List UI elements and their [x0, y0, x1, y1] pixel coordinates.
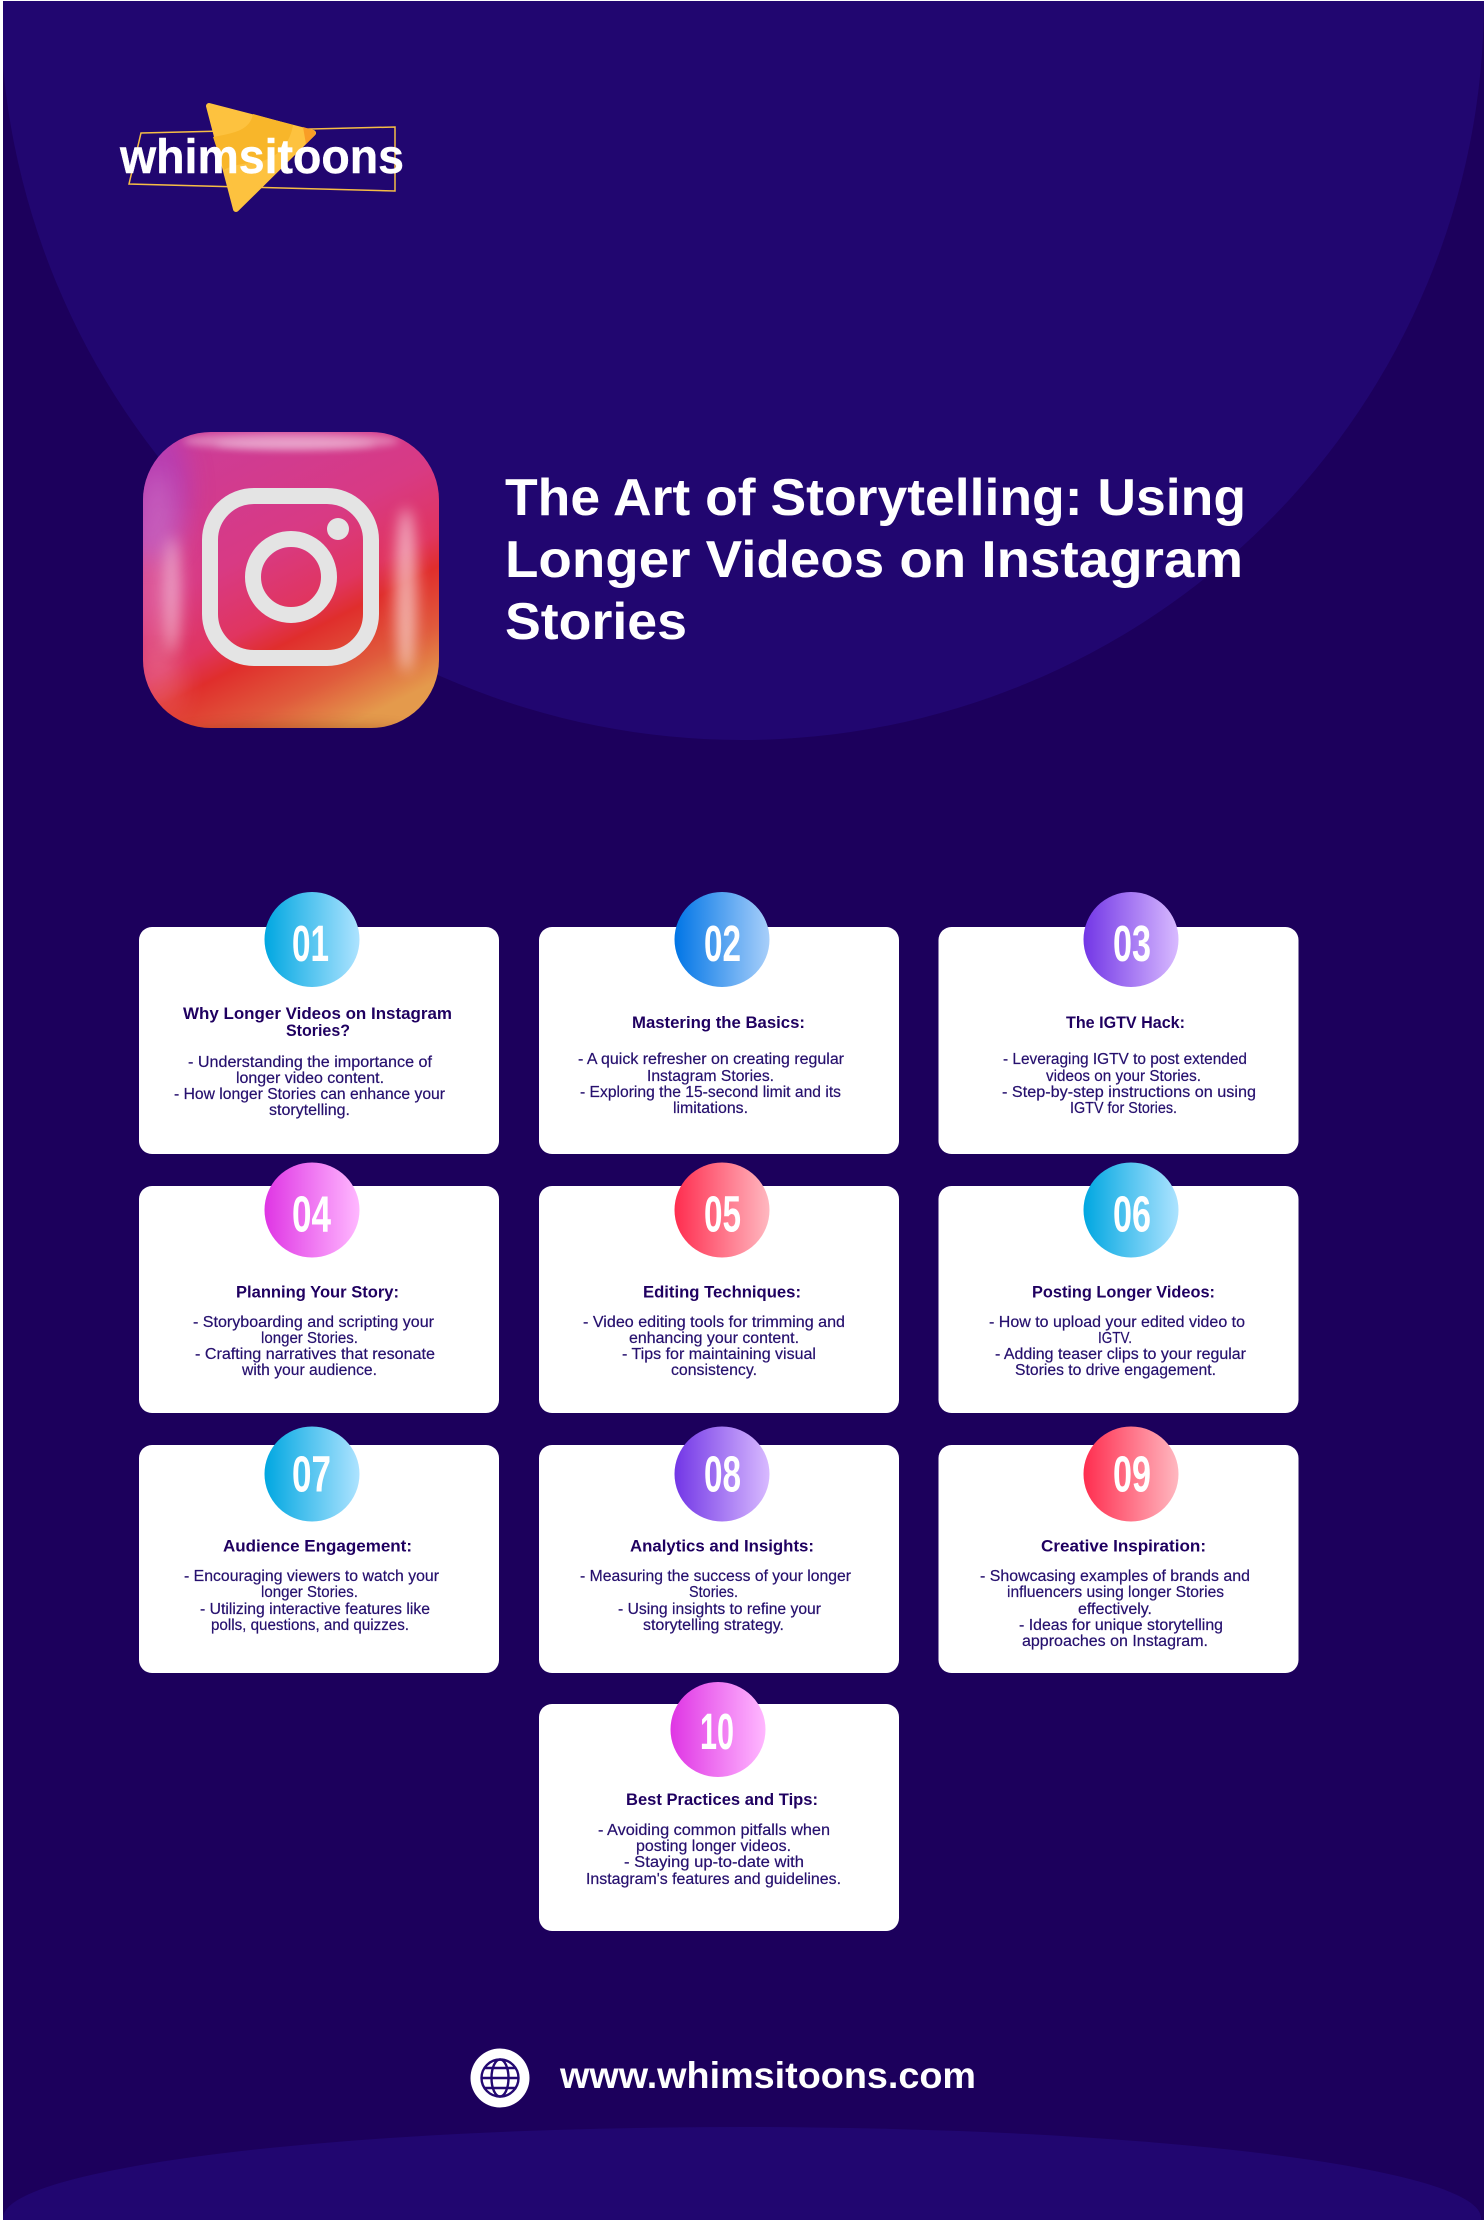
body 05: consistency. [671, 1362, 757, 1379]
body 03: - Step-by-step instructions on using [1002, 1084, 1256, 1101]
heading 06: Posting Longer Videos: [1032, 1282, 1215, 1302]
footer: website [470, 2048, 976, 2108]
body 01: storytelling. [269, 1102, 350, 1119]
bottom arc background shape [3, 2127, 1481, 2220]
panel: card 05 [539, 1162, 899, 1413]
body 06: Stories to drive engagement. [1015, 1362, 1216, 1379]
body 02 [578, 1051, 844, 1117]
tile highlights [143, 432, 426, 728]
badge 01 [264, 892, 360, 987]
body 08: - Measuring the success of your longer [580, 1568, 851, 1585]
body 01 [174, 1054, 445, 1119]
body 09: influencers using longer Stories [1007, 1584, 1224, 1601]
body 08: - Using insights to refine your [618, 1601, 821, 1618]
body 07: - Encouraging viewers to watch your [184, 1568, 439, 1585]
body 05: enhancing your content. [629, 1330, 799, 1347]
body 01: - Understanding the importance of [188, 1054, 433, 1071]
panel: card 07 [139, 1426, 499, 1673]
body 10: posting longer videos. [636, 1838, 791, 1855]
body 09: effectively. [1078, 1601, 1152, 1618]
body 09 [980, 1568, 1250, 1650]
body 02: limitations. [673, 1100, 748, 1117]
panel: card 03 [938, 892, 1298, 1154]
badge 02 [674, 892, 770, 987]
logo triangle tip [303, 127, 315, 144]
badge 01: 01 [292, 915, 329, 972]
panel: card 10 [539, 1682, 899, 1931]
badge 04: 04 [292, 1186, 331, 1242]
body 02: Instagram Stories. [647, 1068, 774, 1085]
body 09: - Ideas for unique storytelling [1019, 1617, 1223, 1634]
body 07: - Utilizing interactive features like [200, 1601, 430, 1618]
badge 06: 06 [1113, 1186, 1151, 1242]
badge 07 [264, 1426, 360, 1522]
badge 06 [1084, 1162, 1178, 1258]
heading 10: Best Practices and Tips: [626, 1790, 818, 1809]
instagram lens [253, 539, 329, 615]
badge 03 [1084, 892, 1178, 987]
instagram dot [327, 518, 349, 540]
heading 01: Stories? [286, 1021, 350, 1040]
panel: card 08 [539, 1426, 899, 1673]
title: Stories [505, 593, 687, 651]
body 09: - Showcasing examples of brands and [980, 1568, 1250, 1585]
title: Longer Videos on Instagram [505, 531, 1243, 589]
top arc background shape [0, 0, 1484, 740]
instagram camera outline [210, 496, 371, 658]
logo play triangle [209, 106, 313, 209]
body 07: longer Stories. [261, 1584, 358, 1601]
body 10 [586, 1822, 841, 1888]
body 10: - Avoiding common pitfalls when [598, 1822, 830, 1839]
panel: card 02 [539, 892, 899, 1154]
body 03: - Leveraging IGTV to post extended [1003, 1051, 1247, 1068]
heading 02: Mastering the Basics: [632, 1013, 805, 1032]
body 03 [1002, 1051, 1256, 1117]
panel: card 01 [139, 892, 499, 1154]
body 08: Stories. [689, 1584, 738, 1601]
heading 07: Audience Engagement: [223, 1536, 412, 1556]
body 07: polls, questions, and quizzes. [211, 1617, 409, 1634]
body 01: - How longer Stories can enhance your [174, 1086, 445, 1103]
body 05: - Tips for maintaining visual [622, 1346, 816, 1363]
body 05: - Video editing tools for trimming and [583, 1314, 845, 1331]
badge 08 [674, 1426, 770, 1522]
logo triangle shade [213, 114, 293, 170]
body 06 [989, 1314, 1246, 1379]
body 04: - Storyboarding and scripting your [193, 1314, 434, 1331]
body 04: longer Stories. [261, 1330, 358, 1347]
badge 08: 08 [704, 1446, 741, 1502]
heading 01: Why Longer Videos on Instagram [183, 1004, 452, 1023]
badge 10 [670, 1682, 766, 1777]
panel: card 04 [139, 1162, 499, 1413]
body 08 [580, 1568, 851, 1634]
body 06: - Adding teaser clips to your regular [995, 1346, 1246, 1363]
tile base [143, 432, 439, 728]
heading 03: The IGTV Hack: [1066, 1013, 1185, 1032]
logo: whimsitoons [119, 106, 404, 209]
body 09: approaches on Instagram. [1022, 1633, 1208, 1650]
body 08: storytelling strategy. [643, 1617, 784, 1634]
body 07 [184, 1568, 439, 1634]
badge 07: 07 [292, 1446, 331, 1502]
badge 09: 09 [1113, 1446, 1151, 1502]
body 10: Instagram's features and guidelines. [586, 1871, 841, 1888]
panel: card 06 [938, 1162, 1298, 1413]
title [505, 469, 1246, 651]
body 03: videos on your Stories. [1046, 1068, 1201, 1085]
body 02: - A quick refresher on creating regular [578, 1051, 844, 1068]
icon: globe [470, 2048, 530, 2108]
badge 02: 02 [704, 915, 741, 972]
heading 05: Editing Techniques: [643, 1282, 801, 1302]
body 02: - Exploring the 15-second limit and its [580, 1084, 841, 1101]
body 04: - Crafting narratives that resonate [195, 1346, 435, 1363]
body 06: IGTV. [1098, 1330, 1132, 1347]
badge 10: 10 [700, 1703, 734, 1760]
badge 05: 05 [704, 1186, 741, 1242]
heading 04: Planning Your Story: [236, 1282, 399, 1302]
logo frame [129, 127, 395, 191]
body 06: - How to upload your edited video to [989, 1314, 1245, 1331]
body 04: with your audience. [241, 1362, 377, 1379]
website url: www.whimsitoons.com [559, 2055, 976, 2096]
logo wordmark: whimsitoons [119, 131, 404, 184]
body 04 [193, 1314, 435, 1379]
badge 09 [1084, 1426, 1178, 1522]
body 10: - Staying up-to-date with [624, 1854, 804, 1871]
badge 05 [674, 1162, 770, 1258]
icon: instagram 3D tile [143, 432, 439, 728]
heading 08: Analytics and Insights: [630, 1536, 814, 1556]
heading 09: Creative Inspiration: [1041, 1536, 1206, 1556]
body 03: IGTV for Stories. [1070, 1100, 1177, 1117]
badge 04 [264, 1162, 360, 1258]
badge 03: 03 [1113, 915, 1151, 972]
title: The Art of Storytelling: Using [505, 469, 1246, 527]
body 05 [583, 1314, 845, 1379]
heading 01 [183, 1004, 452, 1040]
body 01: longer video content. [236, 1070, 384, 1087]
panel: card 09 [938, 1426, 1298, 1673]
